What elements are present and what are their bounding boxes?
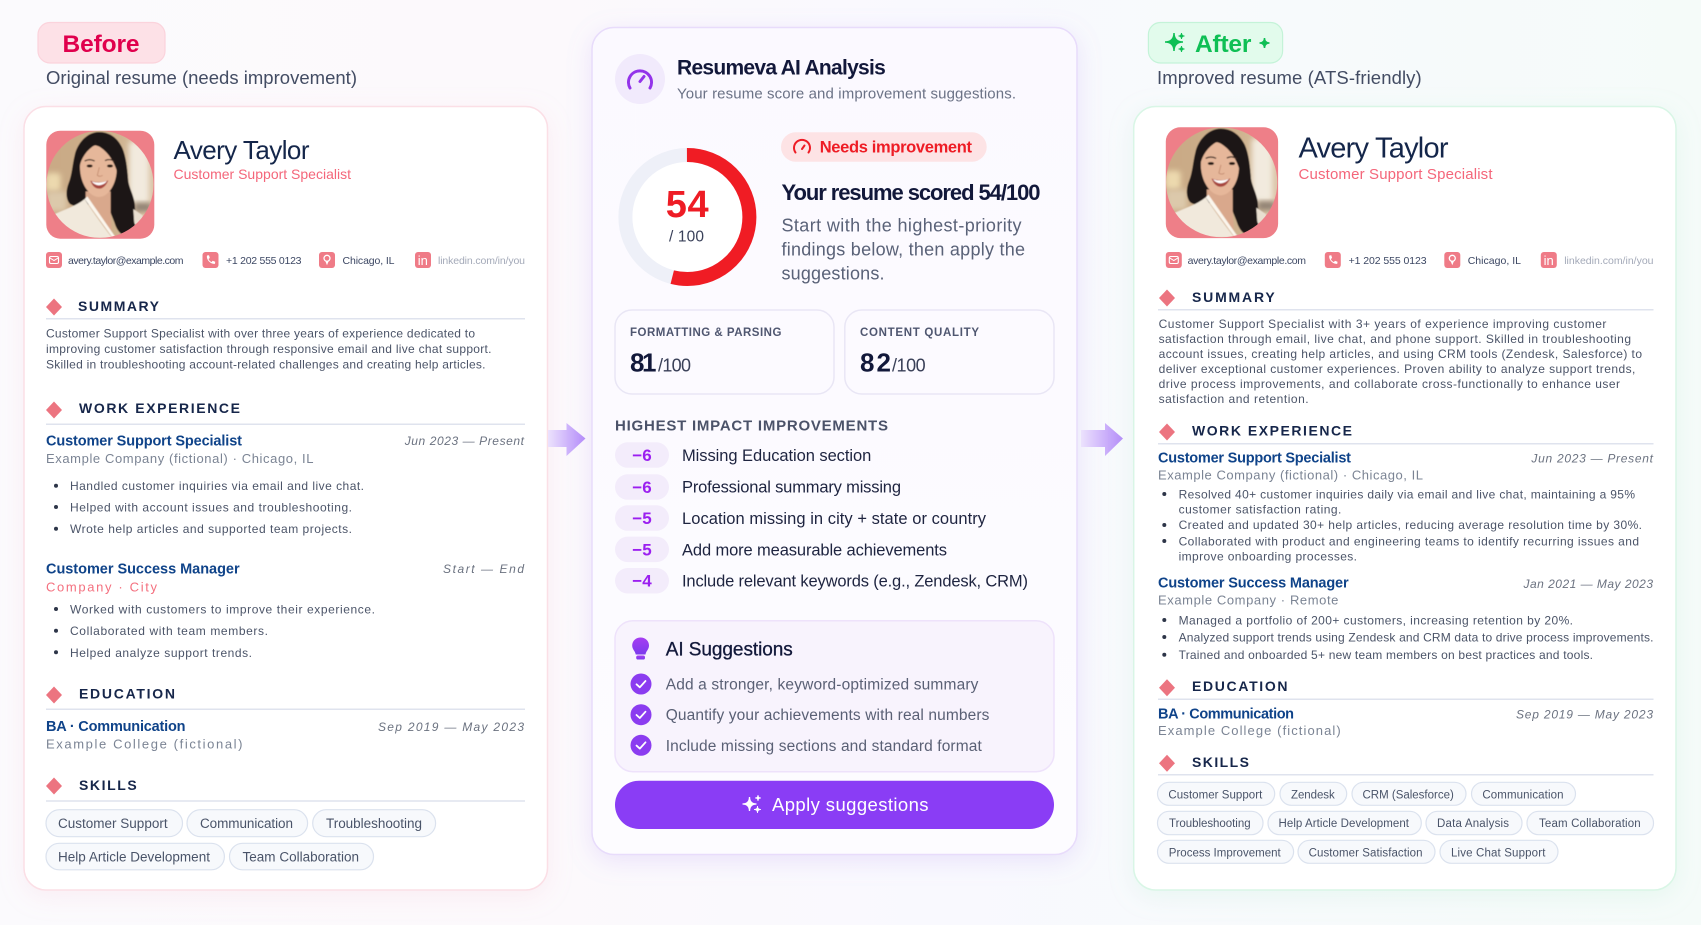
section: work experience: Handled customer inquiries via email and live chat. [70,479,364,493]
section: education: BA · Communication [1158,706,1294,722]
score donut chart [625,155,749,279]
stat card: formatting [615,310,834,394]
section: education [46,686,525,752]
stat card: content: /100 [892,356,926,376]
section: education: Example College (fictional) [1158,723,1341,738]
section: work experience: Customer Support Specialist [46,434,242,450]
score explanation: Start with the highest-priority [782,216,1022,236]
contact row [46,252,525,268]
subtitle: before: Original resume (needs improvement) [46,67,357,88]
score explanation: suggestions. [782,264,884,284]
job role: Customer Support Specialist [174,166,351,182]
stat card: formatting: /100 [658,356,691,376]
section: summary: improving customer satisfaction through responsive email and live chat support. [46,342,492,356]
section: summary: deliver exceptional customer experiences. Proven ability to analyze support trends, [1159,362,1635,376]
section: work experience: customer satisfaction rating. [1179,503,1341,517]
icon: gauge [615,54,665,104]
contact row: avery.taylor@example.com [1188,255,1306,267]
status pill: Needs improvement [820,139,972,157]
section: skills: Help Article Development [1278,818,1410,830]
stat card: content: CONTENT QUALITY [860,327,979,339]
section: skills: Troubleshooting [326,816,422,831]
section: skills: Process Improvement [1169,847,1281,859]
arrow: analysis to after [1081,423,1123,456]
badge: after: After [1195,31,1252,58]
status pill [781,132,987,162]
score donut chart: 54 [666,184,709,226]
section: summary: SUMMARY [1192,289,1275,305]
section: summary: Customer Support Specialist with over three years of experience dedicated to [46,326,475,340]
suggestion items: Quantify your achievements with real numbers [666,707,990,724]
panel: before resume [24,106,548,890]
section: summary: SUMMARY [78,298,160,314]
suggestion items: Include missing sections and standard format [666,738,982,755]
contact row: in [418,253,428,268]
section: summary: Customer Support Specialist with 3+ years of experience improving customer [1159,317,1606,331]
panel: after resume [1134,106,1676,890]
before header [38,22,357,88]
section: skills: Customer Support [1168,789,1263,801]
section: summary: satisfaction through email, live chat, and phone support. Skilled in troubleshooting [1159,332,1631,346]
photo [1163,125,1282,241]
section: work experience: Customer Success Manager [1158,576,1349,592]
section: skills [46,777,525,870]
photo [44,128,158,242]
section: work experience: Jun 2023 — Present [1530,452,1654,466]
section: skills [1158,754,1654,863]
name: Avery Taylor [1298,132,1449,164]
section: skills: Customer Support [58,816,168,831]
section: skills: Help Article Development [58,849,210,864]
section: skills: Team Collaboration [1539,818,1641,830]
section: summary: satisfaction and retention. [1159,392,1309,406]
improvements list: Missing Education section [682,447,871,465]
section: work experience: Jan 2021 — May 2023 [1522,577,1653,591]
contact row: Chicago, IL [342,255,395,267]
improvements list: −5 [632,540,652,559]
analysis subtitle: Your resume score and improvement suggestions. [677,85,1016,102]
section: summary: Skilled in troubleshooting account-related challenges and creating help articles. [46,358,486,372]
section: work experience: Start — End [443,562,524,576]
section: work experience: Collaborated with product and engineering teams to identify recurring issues and [1179,534,1639,548]
section: work experience: improve onboarding processes. [1179,549,1357,563]
section: skills: Team Collaboration [242,849,359,864]
icon: light bulb [632,638,649,660]
section: education: BA · Communication [46,719,186,735]
improvements list: −6 [632,478,652,497]
section: work experience: WORK EXPERIENCE [1192,422,1352,438]
suggestion items [630,674,990,756]
section: summary: account issues, creating help articles, and using CRM tools (Zendesk, Salesforce) to [1159,347,1642,361]
badge: after [1148,22,1283,63]
score explanation: findings below, then apply the [782,240,1025,260]
section: skills: Communication [1482,789,1564,801]
section: work experience: Customer Success Manager [46,562,240,578]
improvements list: Include relevant keywords (e.g., Zendesk, CRM) [682,572,1028,590]
section: skills: Zendesk [1291,789,1335,801]
improvements list: −4 [632,572,652,591]
section: skills: Customer Satisfaction [1309,847,1422,859]
contact row: Chicago, IL [1468,255,1521,267]
analysis title: Resumeva AI Analysis [677,57,886,80]
section: summary [1158,289,1654,406]
badge: before [38,22,165,63]
section: work experience: Analyzed support trends using Zendesk and CRM data to drive process improvements. [1179,631,1654,645]
contact row: linkedin.com/in/you [1564,255,1654,267]
section: skills: SKILLS [1192,754,1249,770]
section: summary: drive process improvements, and collaborate cross-functionally to enhance user [1159,377,1620,391]
section: skills: Live Chat Support [1451,847,1546,859]
improvements heading: HIGHEST IMPACT IMPROVEMENTS [615,418,888,435]
section: work experience: Company · City [46,580,158,595]
subtitle: after: Improved resume (ATS-friendly) [1157,67,1422,88]
section: work experience: Helped with account issues and troubleshooting. [70,501,352,515]
section: skills: Data Analysis [1437,818,1509,830]
section: work experience: Jun 2023 — Present [404,434,525,448]
section: work experience: Customer Support Specialist [1158,450,1351,466]
name: Avery Taylor [174,135,310,165]
score donut chart: / 100 [669,229,704,246]
improvements list [615,442,1028,594]
section: work experience: Wrote help articles and supported team projects. [70,522,352,536]
section: education: EDUCATION [79,686,175,702]
after header [1148,22,1422,88]
stat card: formatting: FORMATTING & PARSING [630,327,781,339]
section: work experience: Trained and onboarded 5+ new team members on best practices and tools. [1179,648,1593,662]
improvements list: −5 [632,509,652,528]
section: education: EDUCATION [1192,678,1288,694]
score heading: Your resume scored 54/100 [782,180,1040,205]
section: work experience [46,400,525,660]
panel: AI analysis [592,28,1077,854]
section: education [1158,678,1654,738]
stat card: content: 82 [860,348,891,378]
improvements list: Location missing in city + state or country [682,510,987,528]
arrow: before to analysis [548,423,586,456]
suggestions title: AI Suggestions [666,640,793,660]
score explanation [782,216,1025,284]
section: skills: Communication [200,816,293,831]
section: summary [46,298,525,372]
improvements list: Add more measurable achievements [682,541,947,559]
section: work experience: Example Company · Remote [1158,593,1338,608]
section: work experience: Helped analyze support trends. [70,646,252,660]
contact row: in [1544,253,1554,268]
section: education: Sep 2019 — May 2023 [1516,707,1653,721]
contact row: avery.taylor@example.com [68,255,184,267]
button: apply suggestions: Apply suggestions [772,794,928,815]
job role: Customer Support Specialist [1298,166,1493,183]
AI suggestions box [615,621,1054,772]
stat card: formatting: 81 [630,348,656,378]
suggestion items: Add a stronger, keyword-optimized summary [666,676,979,694]
section: work experience: Resolved 40+ customer inquiries daily via email and live chat, maintaining a 95% [1179,488,1635,502]
section: work experience: WORK EXPERIENCE [79,400,240,416]
improvements list: Professional summary missing [682,478,901,496]
section: work experience: Collaborated with team members. [70,624,268,638]
contact row [1166,252,1654,268]
contact row: linkedin.com/in/you [438,255,525,267]
section: work experience: Example Company (fictional) · Chicago, IL [46,451,314,466]
section: skills: CRM (Salesforce) [1362,789,1454,801]
section: work experience: Created and updated 30+ help articles, reducing average resolution time by 30%. [1179,518,1642,532]
button: apply suggestions [615,781,1054,829]
section: work experience: Worked with customers to improve their experience. [70,602,375,616]
section: skills: SKILLS [79,777,137,793]
contact row: +1 202 555 0123 [226,255,302,267]
section: work experience: Example Company (fictional) · Chicago, IL [1158,467,1423,482]
section: work experience: Managed a portfolio of 200+ customers, increasing retention by 20%. [1179,613,1573,627]
section: education: Sep 2019 — May 2023 [378,720,524,734]
section: education: Example College (fictional) [46,737,242,752]
panel header [615,54,1016,104]
badge: before: Before [62,31,140,58]
stat card: content [845,310,1054,394]
contact row: +1 202 555 0123 [1349,255,1427,267]
section: skills: Troubleshooting [1169,818,1251,830]
improvements list: −6 [632,446,652,465]
section: work experience [1158,422,1654,662]
